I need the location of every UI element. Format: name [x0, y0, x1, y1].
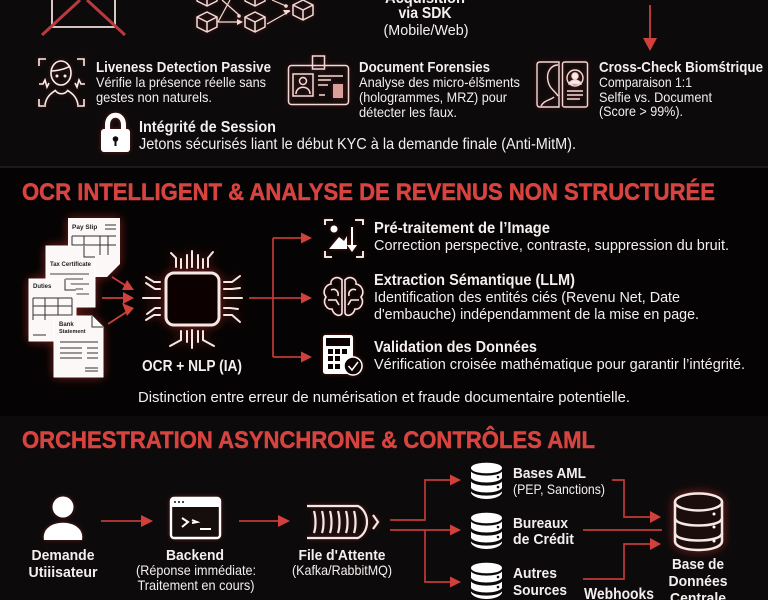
- label: backend: (Réponse immédiate:: [136, 562, 256, 578]
- icon: calculator: [323, 335, 362, 375]
- text: document forensics: Analyse des micro-élšments: [359, 74, 520, 90]
- text: credit bureaus: de Crédit: [513, 531, 574, 548]
- text: other sources: Autres: [513, 565, 557, 582]
- icon: user: [44, 496, 82, 540]
- text: other sources: Sources: [513, 582, 567, 599]
- label: user request: [28, 547, 98, 581]
- text: document forensics: détecter les faux.: [359, 104, 457, 120]
- arrows: sources to central database: [583, 480, 662, 579]
- label: central database: [668, 556, 728, 600]
- text: data validation: [374, 339, 745, 373]
- icon: image preprocessing: [325, 220, 363, 257]
- label: backend: Traitement en cours): [138, 577, 254, 593]
- text: data validation: Vérification croisée mathématique pour garantir l’intégrité.: [374, 356, 745, 373]
- label: user request: Demande: [32, 547, 94, 564]
- label: queue: File d'Attente: [298, 547, 386, 564]
- document: pay slip: Pay Slip: [72, 224, 97, 231]
- text: image preprocessing: Pré-traitement de l’Image: [374, 220, 550, 237]
- text: image preprocessing: [374, 220, 729, 254]
- text: liveness detection: Vérifie la présence réelle sans: [96, 74, 266, 90]
- text: document forensics: Document Forensies: [359, 59, 490, 76]
- arrows: chip to steps: [249, 232, 312, 362]
- text: credit bureaus: Bureaux: [513, 515, 569, 532]
- text: liveness detection: gestes non naturels.: [96, 89, 212, 105]
- icon: stack of documents: [29, 218, 120, 377]
- text: semantic extraction: d'embauche) indépendamment de la mise en page.: [374, 306, 699, 323]
- label: backend: [136, 547, 256, 593]
- icon: crossed out frame: [42, 0, 125, 35]
- icon: liveness face: [39, 59, 85, 106]
- text: session integrity: [139, 119, 576, 153]
- caption: error vs fraud: Distinction entre erreur de numérisation et fraude documentaire potentielle.: [138, 389, 630, 406]
- title: orchestration section: ORCHESTRATION ASYNCHRONE & CONTRÔLES AML: [22, 426, 595, 454]
- icon: biometric cross-check: [537, 62, 588, 107]
- label: queue: [292, 547, 392, 578]
- text: document forensics: [359, 59, 520, 120]
- icon: padlock: [101, 115, 130, 152]
- icon: backend terminal: [171, 498, 220, 538]
- document: tax certificate: [46, 246, 95, 307]
- document: duties: Duties: [33, 284, 52, 290]
- text: data validation: Validation des Données: [374, 339, 537, 356]
- text: semantic extraction: [374, 272, 699, 323]
- label: central database: Données: [668, 573, 728, 590]
- document: bank statement: [54, 316, 103, 377]
- icon: cube network: [197, 0, 313, 32]
- text: session integrity: Intégrité de Session: [139, 119, 276, 136]
- arrow: user to backend: [101, 515, 153, 527]
- document: pay slip: [68, 218, 120, 277]
- text: cross-check: [599, 59, 763, 119]
- heading: acquisition via SDK: via SDK: [398, 5, 452, 22]
- text: liveness detection: Liveness Detection Passive: [96, 59, 271, 76]
- label: central database: Base de: [672, 556, 724, 573]
- middle band: [0, 168, 768, 416]
- document: duties: [29, 279, 76, 341]
- title: OCR section: OCR INTELLIGENT & ANALYSE DE REVENUS NON STRUCTURÉE: [22, 178, 715, 206]
- text: image preprocessing: Correction perspective, contraste, suppression du bruit.: [374, 237, 729, 254]
- text: cross-check: (Score > 99%).: [599, 103, 683, 119]
- icon: other sources database: [471, 563, 502, 599]
- text: AML bases: Bases AML: [513, 465, 586, 482]
- arrows: documents to chip: [102, 277, 134, 324]
- arrow: backend to queue: [239, 515, 290, 527]
- icon: message queue: [307, 506, 378, 538]
- icon: AML database: [471, 463, 502, 499]
- heading: acquisition via SDK: (Mobile/Web): [384, 22, 468, 39]
- icon: AI chip: [143, 251, 242, 348]
- document: bank statement: Statement: [59, 329, 86, 335]
- text: document forensics: (hologrammes, MRZ) pour: [359, 89, 507, 105]
- arrows: queue to sources: [390, 474, 461, 588]
- text: session integrity: Jetons sécurisés liant le début KYC à la demande finale (Anti-MitM).: [139, 136, 576, 153]
- label: OCR + NLP: OCR + NLP (IA): [142, 358, 242, 375]
- document: bank statement: Bank: [59, 322, 74, 328]
- text: cross-check: Selfie vs. Document: [599, 89, 712, 105]
- label: queue: (Kafka/RabbitMQ): [292, 562, 392, 578]
- label: backend: Backend: [166, 547, 224, 564]
- icon: credit database: [471, 513, 502, 549]
- text: AML bases: [513, 465, 605, 497]
- text: AML bases: (PEP, Sanctions): [513, 481, 605, 497]
- label: user request: Utiiisateur: [28, 564, 98, 581]
- icon: ID card: [288, 56, 348, 104]
- text: semantic extraction: Extraction Sémantique (LLM): [374, 272, 575, 289]
- icon: central database: [675, 494, 722, 550]
- text: cross-check: Comparaison 1:1: [599, 74, 692, 90]
- text: other sources: [513, 565, 567, 599]
- text: liveness detection: [96, 59, 271, 105]
- text: credit bureaus: [513, 515, 574, 548]
- heading: acquisition via SDK: [384, 0, 468, 39]
- document: tax certificate: Tax Certificate: [50, 262, 92, 268]
- arrow: down to cross-check: [643, 5, 657, 51]
- text: semantic extraction: Identification des entités ciés (Revenu Net, Date: [374, 289, 680, 306]
- icon: brain: [324, 278, 363, 315]
